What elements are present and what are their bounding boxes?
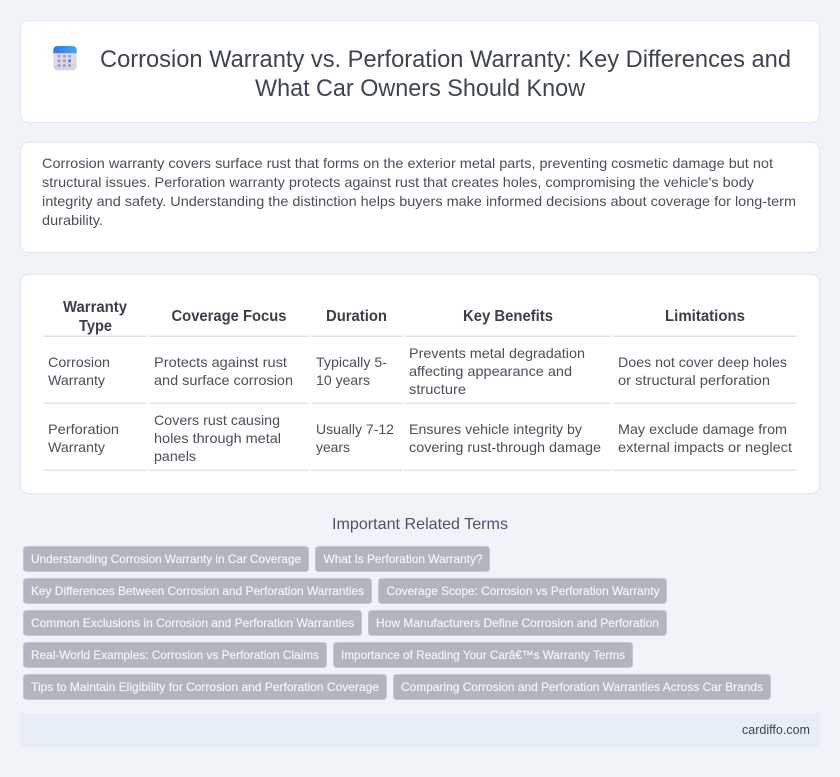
text block: summary: structural issues. Perforation warranty protects against rust that creates holes, compromising the vehicle's body — [42, 174, 754, 190]
table row: perforation warranty: May exclude damage from — [618, 421, 787, 437]
panel: title header — [20, 20, 820, 122]
panel: summary paragraph — [20, 142, 820, 252]
table row: corrosion warranty: and surface corrosion — [154, 372, 293, 388]
related term chips: Key Differences Between Corrosion and Perforation Warranties — [31, 584, 364, 598]
icon: calendar — [53, 46, 77, 70]
text block: summary: Corrosion warranty covers surface rust that forms on the exterior metal parts, preventing cosmetic damage but not — [42, 155, 773, 171]
table header row: Warranty — [63, 299, 127, 316]
title — [100, 46, 791, 102]
table row: corrosion warranty: Protects against rust — [154, 354, 287, 370]
footer — [20, 713, 820, 747]
panel: comparison table — [20, 274, 820, 494]
table row: corrosion warranty: or structural perforation — [618, 372, 770, 388]
text block: summary: integrity and safety. Understanding the distinction helps buyers make informed decisions about coverage for long-term — [42, 193, 796, 209]
table header row: Limitations — [665, 308, 745, 325]
table row: perforation warranty: external impacts or neglect — [618, 439, 792, 455]
related term chips: Understanding Corrosion Warranty in Car Coverage — [31, 552, 301, 566]
table row: perforation warranty: Covers rust causing — [154, 412, 280, 428]
table header row: Duration — [326, 308, 387, 325]
related term chips: What Is Perforation Warranty? — [324, 552, 483, 566]
related term chips: Tips to Maintain Eligibility for Corrosion and Perforation Coverage — [31, 680, 379, 694]
table row: perforation warranty: years — [316, 439, 350, 455]
table row: corrosion warranty: Corrosion — [48, 354, 110, 370]
table header row — [63, 299, 745, 335]
table header row: Coverage Focus — [172, 308, 286, 325]
related term chips: Common Exclusions in Corrosion and Perforation Warranties — [31, 616, 354, 630]
table row: corrosion warranty: 10 years — [316, 372, 370, 388]
text block: summary: durability. — [42, 212, 103, 228]
related term chips: Real-World Examples: Corrosion vs Perforation Claims — [31, 648, 319, 662]
table row: perforation warranty: panels — [154, 448, 196, 464]
text block: summary — [42, 155, 796, 228]
table header row: Type — [79, 318, 112, 335]
related term chips — [24, 546, 770, 700]
table row: perforation warranty — [48, 412, 792, 464]
table row: perforation warranty: Warranty — [48, 439, 105, 455]
footer: cardiffo.com — [742, 723, 810, 737]
table row: corrosion warranty: affecting appearance and — [409, 363, 572, 379]
table header row: Key Benefits — [463, 308, 553, 325]
table row: perforation warranty: covering rust-through damage — [409, 439, 601, 455]
related term chips: Importance of Reading Your Carâ€™s Warranty Terms — [341, 648, 625, 662]
table row: corrosion warranty: Typically 5- — [316, 354, 387, 370]
table row: corrosion warranty: structure — [409, 381, 466, 397]
table row: perforation warranty: Ensures vehicle integrity by — [409, 421, 582, 437]
title: What Car Owners Should Know — [255, 75, 586, 102]
table row: corrosion warranty: Warranty — [48, 372, 105, 388]
table row: perforation warranty: Usually 7-12 — [316, 421, 394, 437]
table row: perforation warranty: holes through metal — [154, 430, 281, 446]
related term chips: Coverage Scope: Corrosion vs Perforation Warranty — [386, 584, 660, 598]
table row: corrosion warranty: Does not cover deep holes — [618, 354, 787, 370]
table row: corrosion warranty: Prevents metal degradation — [409, 345, 585, 361]
table row: perforation warranty: Perforation — [48, 421, 119, 437]
heading: important related terms: Important Related Terms — [332, 516, 508, 533]
related term chips: How Manufacturers Define Corrosion and Perforation — [376, 616, 659, 630]
table row: corrosion warranty — [48, 345, 787, 397]
related term chips: Comparing Corrosion and Perforation Warranties Across Car Brands — [401, 680, 763, 694]
title: Corrosion Warranty vs. Perforation Warranty: Key Differences and — [100, 46, 791, 73]
